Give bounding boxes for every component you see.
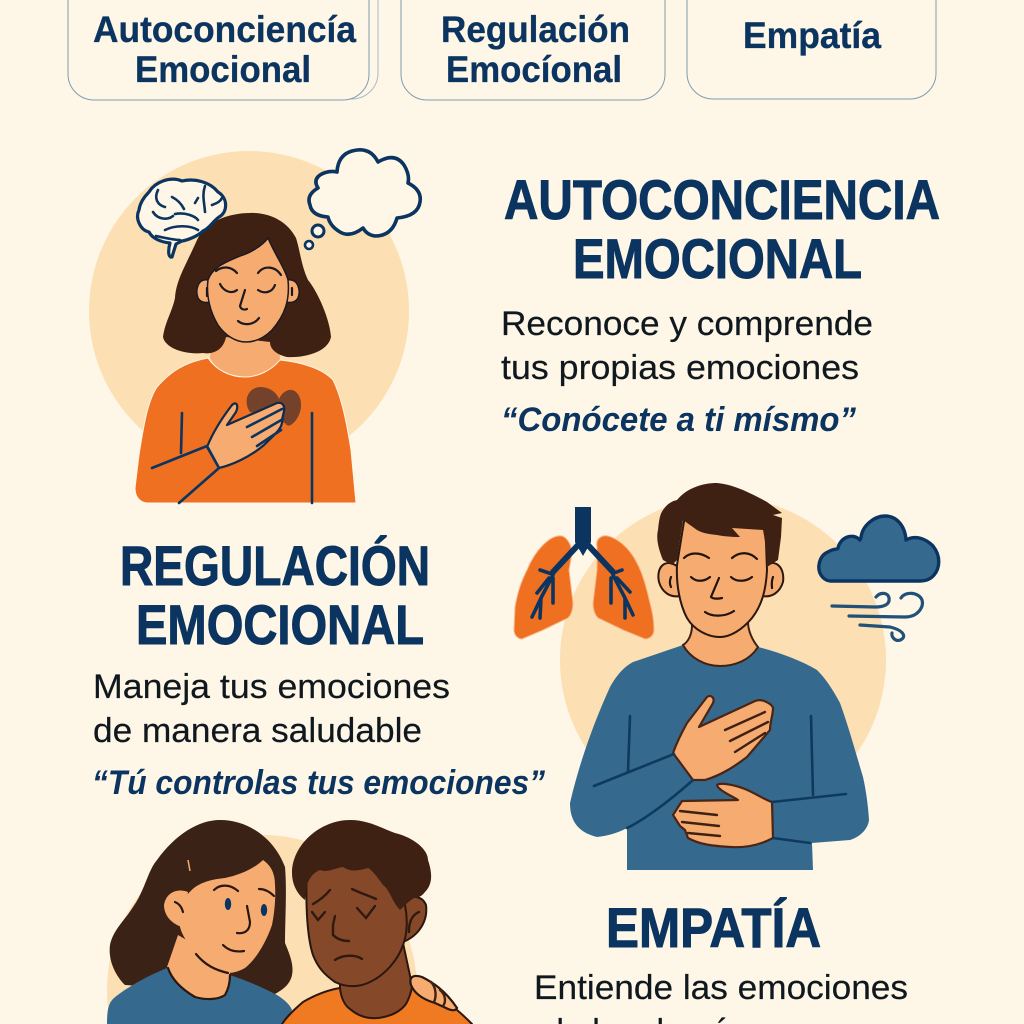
description bbox=[93, 668, 450, 750]
man hair bbox=[292, 820, 431, 910]
description: de manera saludable bbox=[93, 712, 422, 750]
hand on shoulder bbox=[410, 976, 457, 1010]
tab: Empatía bbox=[687, 0, 936, 99]
woman ear bbox=[164, 891, 188, 927]
woman facial features bbox=[207, 267, 292, 324]
heading: EMOCIONAL bbox=[573, 227, 862, 290]
description: Entiende las emociones bbox=[534, 969, 908, 1007]
icon: wind bbox=[832, 593, 922, 640]
description: Reconoce y comprende bbox=[501, 305, 873, 343]
icon: thought bubble bbox=[305, 150, 420, 249]
man ear bbox=[403, 897, 426, 942]
man upper hand bbox=[673, 696, 773, 780]
tab: Regulación Emocional: Regulación bbox=[441, 9, 630, 50]
hair highlight bbox=[188, 860, 190, 871]
illustration: woman with hand on heart bbox=[89, 150, 420, 503]
woman hair bbox=[110, 820, 293, 994]
section text: Empatía bbox=[534, 896, 908, 1024]
man hair bbox=[657, 483, 782, 567]
man neck bbox=[340, 943, 412, 1018]
heading: EMPATÍA bbox=[606, 896, 821, 959]
man facial features bbox=[312, 889, 419, 960]
navigation tabs bbox=[68, 0, 936, 100]
heart bbox=[247, 387, 301, 426]
section text: Regulación Emocional bbox=[92, 534, 545, 802]
heading bbox=[504, 168, 940, 290]
hand and sleeve lines bbox=[594, 716, 846, 843]
description bbox=[534, 969, 908, 1024]
illustration: man breathing bbox=[514, 483, 939, 870]
heading: AUTOCONCIENCIA bbox=[504, 168, 940, 231]
tab: Autoconciencia Emocional bbox=[68, 0, 378, 100]
tab: Empatía: Empatía bbox=[743, 15, 881, 56]
quote: “Tú controlas tus emociones” bbox=[92, 764, 545, 802]
woman hair bbox=[163, 213, 331, 357]
heading bbox=[120, 534, 430, 656]
tab: Regulación Emocional: Emocíonal bbox=[446, 49, 622, 90]
woman face bbox=[180, 860, 275, 973]
illustration: empathy scene bbox=[107, 820, 472, 1024]
quote: “Conócete a ti mísmo” bbox=[501, 401, 856, 439]
man ears bbox=[658, 563, 783, 596]
description: Maneja tus emociones bbox=[93, 668, 450, 706]
hand on heart bbox=[207, 403, 284, 468]
section text: Autoconciencia Emocional bbox=[501, 168, 940, 439]
woman body bbox=[135, 358, 356, 503]
clothing lines bbox=[152, 409, 312, 503]
description bbox=[501, 305, 873, 387]
tab: Autoconciencia Emocional: Emocional bbox=[135, 49, 311, 90]
woman ears bbox=[197, 280, 299, 303]
man face bbox=[677, 515, 767, 637]
icon: brain bbox=[138, 179, 226, 257]
woman face bbox=[207, 238, 288, 342]
woman neck bbox=[210, 325, 280, 377]
icon: cloud bbox=[819, 516, 939, 581]
woman neck bbox=[167, 935, 230, 999]
tab: Regulación Emocional bbox=[401, 0, 665, 100]
man lower hand bbox=[673, 784, 773, 847]
woman blue shirt bbox=[107, 968, 292, 1024]
description: tus propias emociones bbox=[501, 349, 859, 387]
man neck bbox=[683, 622, 758, 666]
tab: Autoconciencia Emocional: Autoconciencía bbox=[93, 9, 356, 50]
man orange shirt bbox=[282, 985, 472, 1024]
heading: REGULACIÓN bbox=[120, 534, 430, 597]
man face bbox=[306, 865, 407, 986]
woman facial features bbox=[168, 886, 274, 999]
icon: lungs bbox=[514, 507, 654, 639]
man facial features bbox=[670, 553, 773, 616]
man body bbox=[570, 645, 869, 870]
heading: EMOCIONAL bbox=[136, 593, 424, 656]
